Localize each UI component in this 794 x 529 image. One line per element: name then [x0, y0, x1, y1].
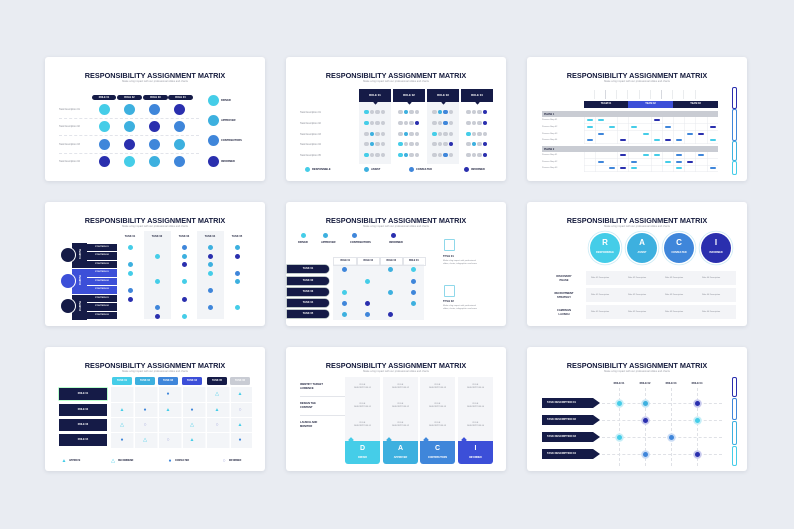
assignment pills — [587, 119, 716, 169]
team header bar: TEAM 01 — [601, 102, 611, 105]
legend row — [298, 233, 403, 244]
role headers: ROLE 02 — [124, 96, 135, 99]
legend: APPROVER — [221, 118, 236, 122]
title: RESPONSIBILITY ASSIGNMENT MATRIX — [85, 216, 225, 225]
legend: DRIVER — [221, 98, 231, 102]
phase bars and grid: PHASE 1 — [544, 112, 554, 116]
description columns: DESCRIPTION 01 — [354, 406, 371, 408]
table: TASK 05 — [303, 312, 313, 315]
table — [286, 257, 426, 320]
description columns: ROLE — [435, 422, 440, 424]
phase rows: LAUNCH — [559, 313, 569, 316]
legend row: APPROVER — [321, 240, 336, 244]
symbols — [120, 390, 242, 442]
symbols: ▲ — [166, 406, 170, 412]
column shading and task headers: TASK 03 — [179, 235, 189, 238]
subtitle: Make a big impact with our professional slides and charts — [363, 370, 429, 373]
task labels: Task Description 02 — [59, 124, 80, 128]
role headers and grid: ROLE 04 — [692, 382, 702, 385]
team header bar: TEAM 03 — [690, 102, 701, 105]
RACI circles: R — [602, 238, 608, 247]
row labels: CONTENT — [300, 406, 313, 409]
row labels: IDENTIFY TARGET — [300, 383, 323, 386]
DACI boxes: C — [435, 445, 440, 452]
description columns: DESCRIPTION 02 — [392, 425, 409, 427]
description columns: DESCRIPTION 03 — [429, 425, 446, 427]
phase rows: Role 03 Description — [665, 311, 683, 313]
symbols: △ — [120, 422, 124, 428]
title: RESPONSIBILITY ASSIGNMENT MATRIX — [326, 216, 466, 225]
slide 5: task role table with titles — [286, 202, 506, 326]
column shading and task headers: TASK 02 — [152, 235, 162, 238]
legend: CONSULTED — [175, 460, 189, 462]
role rows and grid: ROLE 02 — [78, 408, 88, 411]
DACI boxes: I — [475, 445, 476, 452]
position labels: POSITION 03 — [95, 262, 109, 264]
task labels: Task Description 03 — [300, 132, 321, 136]
phase rows: Role 01 Description — [591, 277, 609, 279]
position labels: POSITION 03 — [95, 314, 109, 316]
role rows and grid — [58, 387, 252, 448]
task tabs: TASK 04 — [187, 379, 197, 382]
symbols: ● — [238, 436, 242, 442]
role headers and grid: ROLE 01 — [614, 382, 624, 385]
slide 7: symbol matrix — [45, 347, 265, 471]
phase bars and grid — [542, 111, 718, 172]
title: RESPONSIBILITY ASSIGNMENT MATRIX — [567, 361, 707, 370]
RACI circles: A — [639, 238, 645, 247]
phase bars and grid: Process Step 04 — [542, 139, 557, 141]
phase rows — [554, 271, 736, 319]
legend — [208, 95, 242, 167]
assignment dots — [128, 245, 240, 319]
title: RESPONSIBILITY ASSIGNMENT MATRIX — [567, 71, 707, 80]
legend row: CONTRIBUTORS — [350, 240, 371, 244]
title: RESPONSIBILITY ASSIGNMENT MATRIX — [326, 361, 466, 370]
description columns: ROLE — [360, 422, 365, 424]
slide 2: dot matrix — [286, 57, 506, 181]
table: TASK 01 — [303, 267, 313, 270]
side legend bar — [732, 87, 737, 175]
task labels: Task Description 04 — [300, 142, 321, 146]
symbols: ○ — [166, 436, 170, 442]
team bands with icons: TEAM 02 — [78, 275, 80, 285]
phase bars and grid: PHASE 2 — [544, 148, 554, 150]
team bands with icons — [61, 243, 87, 320]
legend: CONTRIBUTORS — [221, 138, 242, 142]
vertical column labels — [594, 90, 696, 99]
row labels: DESIGN THE — [300, 402, 316, 405]
description columns: ROLE — [435, 403, 440, 405]
RACI circles: INFORMED — [709, 251, 723, 254]
task tabs: TASK 02 — [140, 379, 150, 382]
description columns: ROLE — [473, 384, 478, 386]
team header bar — [584, 101, 718, 108]
task tabs: TASK 05 — [212, 379, 222, 382]
team bands with icons: TEAM 03 — [78, 301, 80, 311]
subtitle: Make a big impact with our professional slides and charts — [122, 370, 188, 373]
description columns: DESCRIPTION 04 — [467, 387, 484, 389]
row labels: MONITOR — [300, 425, 312, 428]
symbols: ○ — [238, 406, 242, 412]
table: ROLE 02 — [363, 260, 373, 262]
slide 8: DACI columns — [286, 347, 506, 471]
RACI circles: ASSIST — [637, 251, 647, 254]
role headers — [92, 95, 193, 100]
legend: ○ — [222, 458, 226, 464]
legend — [62, 458, 242, 464]
slide 9: arrow task matrix — [527, 347, 747, 471]
phase rows: Role 01 Description — [591, 294, 609, 296]
description columns: DESCRIPTION 02 — [392, 406, 409, 408]
position labels: POSITION 02 — [95, 305, 109, 307]
symbols: △ — [215, 390, 219, 396]
legend — [305, 167, 485, 172]
subtitle: Make a big impact with our professional slides and charts — [604, 80, 670, 83]
column shading and task headers: TASK 04 — [205, 235, 215, 238]
role headers: ROLE 01 — [99, 96, 109, 99]
position labels: POSITION 02 — [95, 280, 109, 282]
legend: INFORMED — [221, 160, 235, 162]
symbols: ▲ — [215, 406, 219, 412]
task labels — [59, 108, 199, 162]
icon circles grid — [99, 104, 185, 167]
role headers and grid — [602, 382, 722, 466]
position labels — [87, 244, 117, 319]
column shading and task headers: TASK 05 — [232, 235, 242, 238]
description columns: ROLE — [360, 403, 365, 405]
description columns: ROLE — [398, 384, 403, 386]
task labels: Task Description 02 — [300, 122, 321, 124]
legend: ▲ — [62, 458, 66, 464]
slide 4: team position matrix — [45, 202, 265, 326]
legend row: INFORMED — [389, 240, 403, 244]
column shading and headers: ROLE 04 — [471, 93, 483, 97]
side legend bar — [732, 377, 737, 466]
legend: CONSULTED — [416, 168, 432, 170]
column shading and headers — [359, 89, 493, 164]
RACI circles: CONSULTED — [671, 251, 687, 254]
title blocks with icons: slides, charts, infographics and more — [443, 308, 477, 310]
task tabs: TASK 03 — [163, 379, 173, 382]
subtitle: Make a big impact with our professional slides and charts — [604, 225, 670, 228]
symbols: ▲ — [238, 390, 242, 396]
team header bar: TEAM 02 — [645, 102, 656, 105]
title: RESPONSIBILITY ASSIGNMENT MATRIX — [85, 361, 225, 370]
symbols: ● — [166, 390, 170, 396]
task tabs: TASK 01 — [117, 379, 127, 382]
RACI circles: I — [715, 238, 717, 247]
title: RESPONSIBILITY ASSIGNMENT MATRIX — [85, 71, 225, 80]
phase rows: RECRUITMENT — [555, 292, 573, 295]
symbols: ○ — [215, 422, 219, 428]
RACI circles: C — [676, 238, 682, 247]
assignment dots — [615, 399, 702, 459]
task labels: Task Description 05 — [300, 154, 321, 156]
symbols: ● — [190, 406, 194, 412]
row labels — [300, 383, 345, 428]
task arrows — [542, 398, 600, 459]
role rows and grid: ROLE 01 — [78, 392, 88, 395]
task tabs: TASK 06 — [235, 379, 245, 382]
title: RESPONSIBILITY ASSIGNMENT MATRIX — [567, 216, 707, 225]
phase rows: PHASE — [560, 279, 568, 282]
position labels: POSITION 01 — [95, 246, 109, 248]
role rows and grid: ROLE 04 — [78, 438, 88, 441]
column shading and headers: ROLE 03 — [437, 93, 449, 97]
DACI boxes — [345, 437, 493, 464]
role headers: ROLE 03 — [150, 96, 161, 99]
DACI boxes: DRIVER — [358, 456, 367, 459]
column shading and task headers — [124, 231, 242, 319]
symbols: ▲ — [190, 436, 194, 442]
row labels: LAUNCH AND — [300, 421, 317, 424]
description columns: ROLE — [398, 403, 403, 405]
table: ROLE 03 — [386, 260, 396, 262]
symbols: △ — [190, 422, 194, 428]
legend: ● — [168, 458, 172, 464]
description columns: ROLE — [398, 422, 403, 424]
title: RESPONSIBILITY ASSIGNMENT MATRIX — [326, 71, 466, 80]
symbols: ● — [143, 406, 147, 412]
slide 6: RACI circles — [527, 202, 747, 326]
phase bars and grid: Process Step 02 — [542, 161, 557, 163]
task labels: Task Description 03 — [59, 142, 80, 146]
subtitle: Make a big impact with our professional slides and charts — [363, 80, 429, 83]
slide 1: icon matrix — [45, 57, 265, 181]
slide 3: phase timeline matrix — [527, 57, 747, 181]
phase rows: Role 02 Description — [628, 277, 646, 279]
position labels: POSITION 01 — [95, 271, 109, 273]
task labels: Task Description 01 — [300, 110, 321, 114]
phase bars and grid: Process Step 01 — [542, 119, 557, 121]
description columns: DESCRIPTION 02 — [392, 387, 409, 389]
description columns: ROLE — [473, 422, 478, 424]
phase rows: CAMPAIGN — [557, 309, 571, 312]
legend: △ — [111, 458, 115, 464]
team bands with icons: TEAM 01 — [78, 249, 80, 259]
column shading and task headers: TASK 01 — [125, 235, 135, 238]
DACI boxes: APPROVER — [394, 456, 407, 459]
legend: RECOMMEND — [118, 460, 133, 462]
description columns: ROLE — [473, 403, 478, 405]
legend row: DRIVER — [298, 240, 308, 244]
phase bars and grid: Process Step 03 — [542, 133, 557, 135]
phase rows: STRATEGY — [557, 296, 571, 299]
role headers and grid: ROLE 03 — [666, 382, 676, 385]
task labels — [300, 110, 321, 156]
legend: ASSIST — [371, 168, 380, 170]
symbols: ▲ — [120, 406, 124, 412]
DACI boxes: CONTRIBUTORS — [428, 456, 447, 459]
task labels: Task Description 01 — [59, 108, 80, 110]
position labels: POSITION 03 — [95, 288, 109, 290]
description columns: DESCRIPTION 04 — [467, 425, 484, 427]
table: ROLE 01 — [340, 260, 350, 262]
description columns — [345, 377, 493, 441]
title blocks with icons: Make a big impact with professional — [443, 305, 476, 307]
subtitle: Make a big impact with our professional slides and charts — [122, 225, 188, 228]
DACI boxes: D — [360, 445, 365, 452]
DACI boxes: INFORMED — [469, 456, 482, 459]
table: ROLE 04 — [409, 260, 419, 262]
phase rows: Role 02 Description — [628, 311, 646, 313]
description columns: DESCRIPTION 04 — [467, 406, 484, 408]
legend: INFORMED — [471, 168, 485, 170]
phase rows: Role 03 Description — [665, 277, 683, 279]
subtitle: Make a big impact with our professional slides and charts — [122, 80, 188, 83]
legend: RESPONSIBLE — [312, 168, 331, 170]
column shading and headers: ROLE 02 — [403, 93, 415, 97]
phase rows: DISCOVERY — [556, 275, 572, 278]
description columns: DESCRIPTION 01 — [354, 387, 371, 389]
table: TASK 04 — [303, 301, 313, 304]
title blocks with icons: Make a big impact with professional — [443, 260, 476, 262]
role rows and grid: ROLE 03 — [78, 423, 88, 426]
phase rows: Role 04 Description — [702, 311, 720, 313]
phase rows: Role 04 Description — [702, 277, 720, 279]
title blocks with icons: slides, charts, infographics and more — [443, 263, 477, 265]
symbols: △ — [143, 436, 147, 442]
description columns: ROLE — [360, 384, 365, 386]
symbols: ○ — [143, 422, 147, 428]
phase bars and grid: Process Step 01 — [542, 154, 557, 156]
phase rows: Role 04 Description — [702, 294, 720, 296]
task arrows: TASK DESCRIPTION 04 — [547, 452, 576, 455]
role headers: ROLE 04 — [175, 96, 186, 99]
phase rows: Role 02 Description — [628, 294, 646, 296]
title blocks with icons: TITLE 02 — [443, 300, 454, 303]
task labels: Task Description 04 — [59, 160, 80, 162]
position labels: POSITION 01 — [95, 296, 109, 298]
legend: INFORMED — [229, 460, 241, 462]
symbols: ▲ — [238, 422, 242, 428]
DACI boxes: A — [398, 445, 403, 452]
RACI circles — [588, 230, 734, 266]
dots grid — [364, 110, 487, 157]
column shading and headers: ROLE 01 — [369, 93, 381, 97]
table: TASK 03 — [303, 290, 313, 293]
row labels: AUDIENCE — [300, 387, 314, 390]
phase rows: Role 03 Description — [665, 294, 683, 296]
subtitle: Make a big impact with our professional slides and charts — [604, 370, 670, 373]
position labels: POSITION 02 — [95, 254, 109, 256]
symbols: ● — [120, 436, 124, 442]
task arrows: TASK DESCRIPTION 03 — [547, 435, 576, 438]
role headers and grid: ROLE 02 — [640, 382, 650, 385]
title blocks with icons — [443, 239, 477, 310]
phase bars and grid: Process Step 03 — [542, 167, 557, 169]
task arrows: TASK DESCRIPTION 01 — [547, 401, 576, 404]
subtitle: Make a big impact with our professional slides and charts — [363, 225, 429, 228]
RACI circles: RESPONSIBLE — [596, 251, 614, 254]
phase rows: Role 01 Description — [591, 311, 609, 313]
description columns: DESCRIPTION 03 — [429, 406, 446, 408]
description columns: DESCRIPTION 03 — [429, 387, 446, 389]
legend: APPROVE — [69, 460, 80, 462]
description columns: ROLE — [435, 384, 440, 386]
task tabs — [112, 377, 250, 385]
title blocks with icons: TITLE 01 — [443, 255, 454, 258]
table: TASK 02 — [303, 279, 313, 282]
task arrows: TASK DESCRIPTION 02 — [547, 418, 576, 421]
phase bars and grid: Process Step 02 — [542, 126, 557, 128]
description columns: DESCRIPTION 01 — [354, 425, 371, 427]
